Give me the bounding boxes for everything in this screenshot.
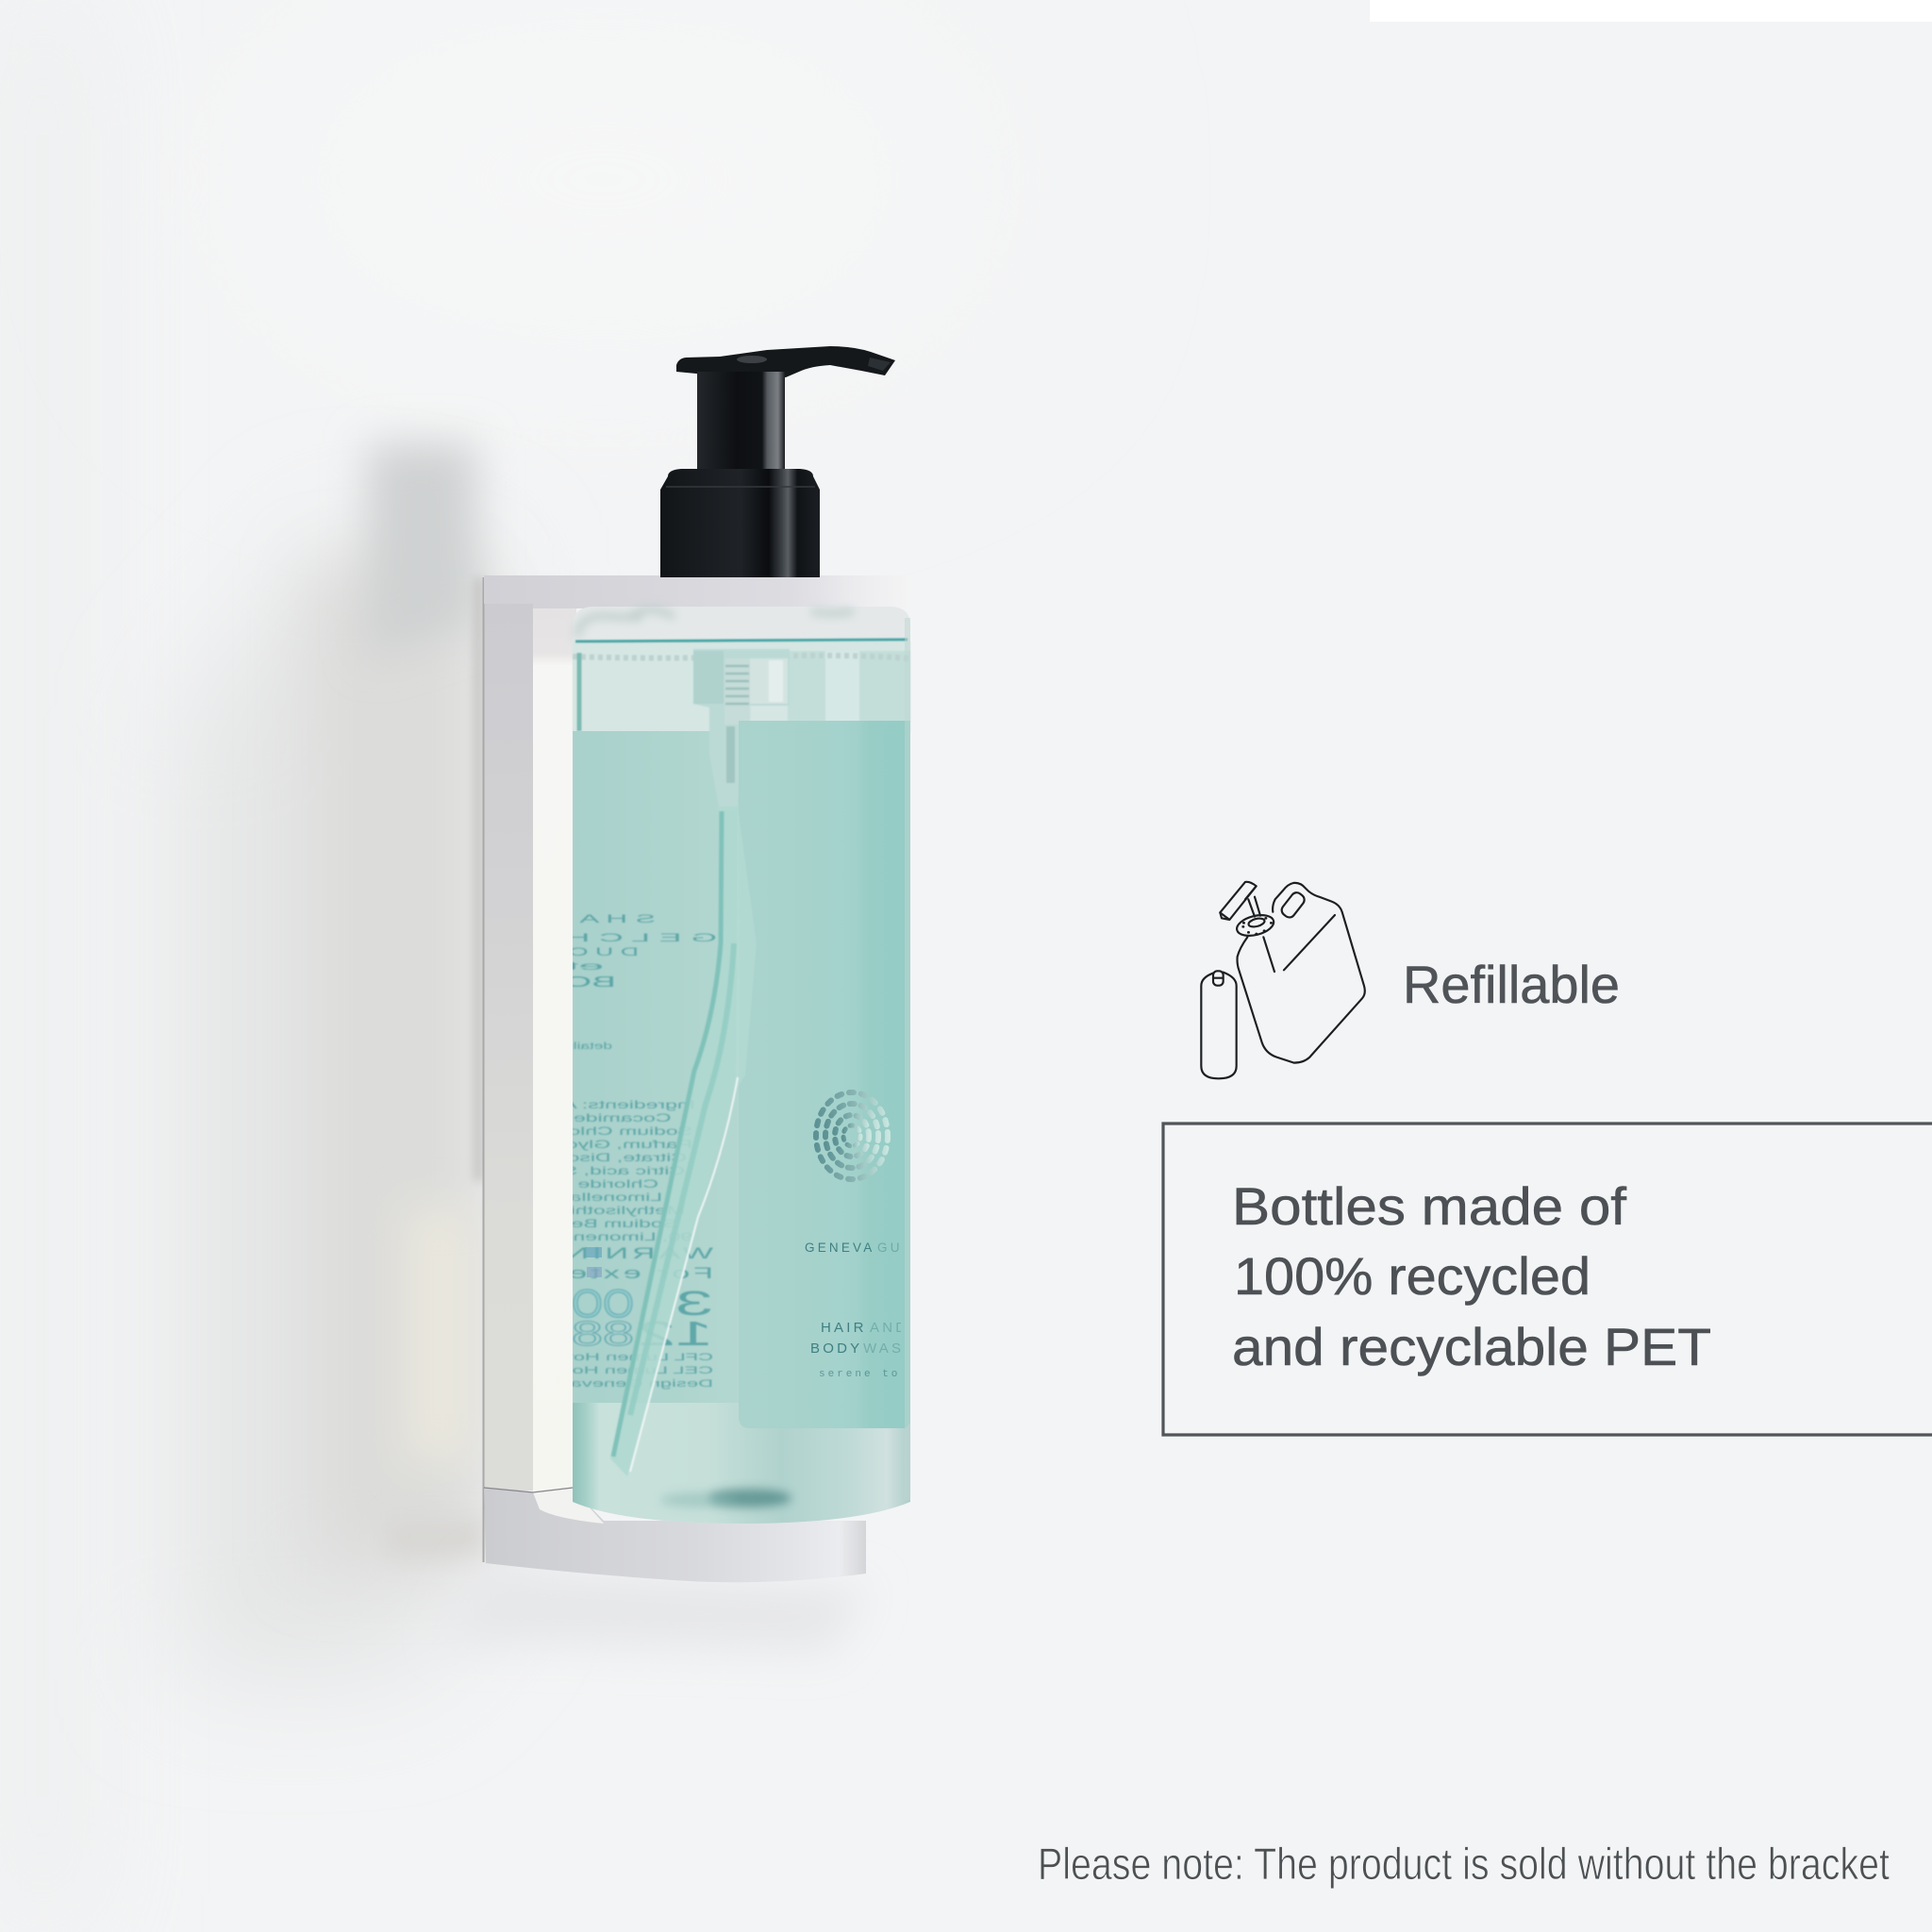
callout text: and recyclable PET (1232, 1317, 1711, 1376)
mirrored back label text: Cocamide Betaine (458, 1112, 695, 1124)
mirrored back label text: BODY (511, 974, 616, 991)
dip tube (610, 807, 757, 1476)
upper liquid zone (573, 640, 910, 732)
front label text (806, 1243, 901, 1376)
mirrored back label text: 12 (638, 1315, 713, 1353)
front label text: serene touch (819, 1369, 927, 1380)
mirrored back label text: Methylisothiazolinone (477, 1205, 685, 1217)
dark spot at bottle base (708, 1489, 791, 1507)
refillable label: Refillable (1403, 955, 1620, 1014)
mirrored back label text: Parfum, Glycol Distearate (445, 1139, 692, 1151)
pump nozzle (676, 346, 895, 377)
front label text: GENEVA (805, 1241, 874, 1255)
pump stem (697, 372, 785, 470)
pump neck inside bottle (693, 649, 790, 811)
mirrored back label text: 3 (675, 1285, 713, 1323)
mirrored back label text: Limonella Linalool (464, 1191, 662, 1204)
mirrored back label text: Sodium Chloride, Citric (471, 1125, 692, 1138)
mirrored back label text (573, 913, 716, 1391)
mirrored back label text: CEL Lumen Hotel (550, 1364, 713, 1376)
bracket (483, 575, 910, 1582)
mirrored back label text: Chloride . Benzyl (471, 1178, 658, 1191)
front label text: WASH (863, 1341, 917, 1357)
mirrored back label text: S H A M P O O (458, 914, 656, 925)
icon: refill jug and bottle (1201, 882, 1365, 1078)
soap bottle (572, 346, 911, 1524)
pump (1220, 882, 1275, 940)
front label text: BODY (810, 1341, 862, 1357)
bubbles at top of bottle (577, 609, 854, 637)
front label (739, 721, 910, 1428)
jug (1238, 883, 1365, 1063)
mirrored back label text: WARNING (533, 1244, 713, 1262)
small bottle (1201, 971, 1237, 1078)
mirrored back label text: Sodium Benzoate, Hexyl (440, 1218, 677, 1230)
mirrored back label text: Ingredients: Aqua, Sodium (441, 1099, 695, 1111)
bracket back arm (484, 575, 533, 1491)
bottle right shade (905, 618, 910, 1500)
front label text: GUILD (877, 1241, 931, 1255)
lower liquid zone (573, 1396, 910, 1524)
mirrored back label text: D U O G E L (496, 947, 639, 958)
mirrored back label text: G E L C H E V E U X (405, 933, 717, 944)
bracket base (484, 1489, 866, 1582)
mirrored back label text: 90, Limonene, Citral (498, 1231, 692, 1243)
wall shadow of bracket (179, 443, 868, 1679)
bracket inner white face (533, 604, 576, 1492)
pump collar (660, 469, 820, 577)
mirrored back label text: 88 (572, 1315, 634, 1353)
mirrored back label text: Citrate, Disodium EDTA (458, 1152, 687, 1164)
bottle body clear top (573, 607, 910, 1524)
front label text: HAIR (821, 1320, 867, 1336)
callout text (1232, 1176, 1711, 1376)
mirrored back label text: OO (572, 1282, 634, 1325)
recycled PET callout box (1163, 1124, 1932, 1435)
callout text: 100% recycled (1234, 1246, 1591, 1306)
front label text: AND (870, 1320, 908, 1336)
mirrored back label text: Citric acid, Sodium (504, 1165, 685, 1177)
callout text: Bottles made of (1232, 1176, 1626, 1236)
bracket top plate (484, 575, 910, 608)
mirrored back label text: details (565, 1041, 612, 1052)
mirrored back label text: Design Geneva (570, 1377, 713, 1390)
back label seen through bottle (573, 731, 752, 1403)
mirrored back label text: CFL Lumen Hotel (552, 1351, 713, 1363)
mirrored back label text: For external (497, 1264, 713, 1282)
front label logo (816, 1092, 888, 1179)
mirrored back label text: et (563, 961, 604, 973)
